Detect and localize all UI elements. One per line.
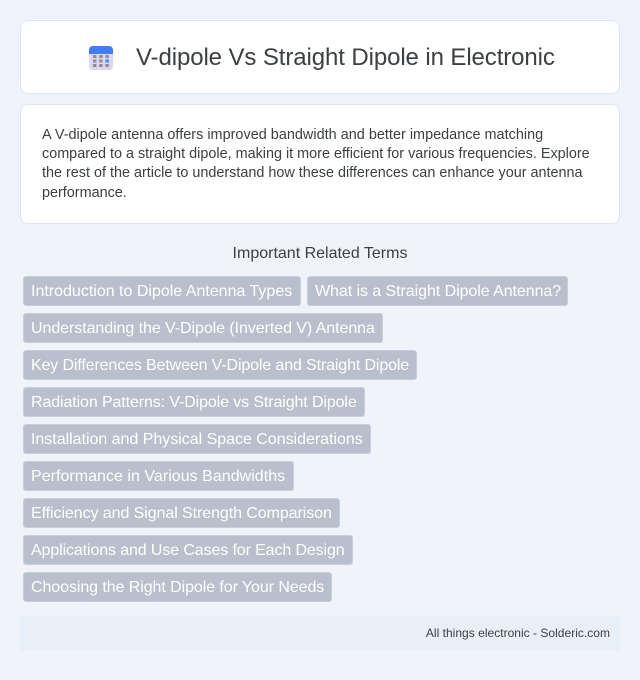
tag: Efficiency and Signal Strength Comparison: [31, 505, 332, 522]
tag list: [23, 276, 568, 602]
intro text: compared to a straight dipole, making it more efficient for various frequencies. Explore: [42, 146, 590, 162]
tag: Introduction to Dipole Antenna Types: [31, 283, 292, 300]
tag: [23, 424, 371, 454]
footer: [20, 616, 620, 650]
tag: [23, 572, 332, 602]
intro text: A V-dipole antenna offers improved bandwidth and better impedance matching: [42, 127, 543, 143]
tag: [307, 276, 568, 306]
tag: [23, 350, 417, 380]
intro text: the rest of the article to understand how these differences can enhance your antenna: [42, 165, 583, 181]
tag: [23, 461, 294, 491]
intro text: performance.: [42, 185, 127, 201]
tag: Understanding the V-Dipole (Inverted V) Antenna: [31, 320, 375, 337]
tag: [23, 313, 383, 343]
icon: calendar: [89, 46, 113, 70]
tag: Installation and Physical Space Considerations: [31, 431, 363, 448]
heading: related terms: Important Related Terms: [233, 245, 407, 262]
tag: Choosing the Right Dipole for Your Needs: [31, 579, 324, 596]
intro card: [20, 104, 620, 224]
intro text: [42, 127, 590, 201]
title: V-dipole Vs Straight Dipole in Electronic: [136, 44, 555, 71]
tag: Key Differences Between V-Dipole and Straight Dipole: [31, 357, 409, 374]
tag: What is a Straight Dipole Antenna?: [315, 283, 561, 300]
tag: [23, 276, 301, 306]
tag: [23, 498, 340, 528]
tag: Radiation Patterns: V-Dipole vs Straight Dipole: [31, 394, 357, 411]
tag: Performance in Various Bandwidths: [31, 468, 285, 485]
footer: All things electronic - Solderic.com: [426, 626, 610, 640]
tag: [23, 535, 353, 565]
tag: Applications and Use Cases for Each Design: [31, 542, 345, 559]
tag: [23, 387, 365, 417]
title card: [20, 20, 620, 94]
